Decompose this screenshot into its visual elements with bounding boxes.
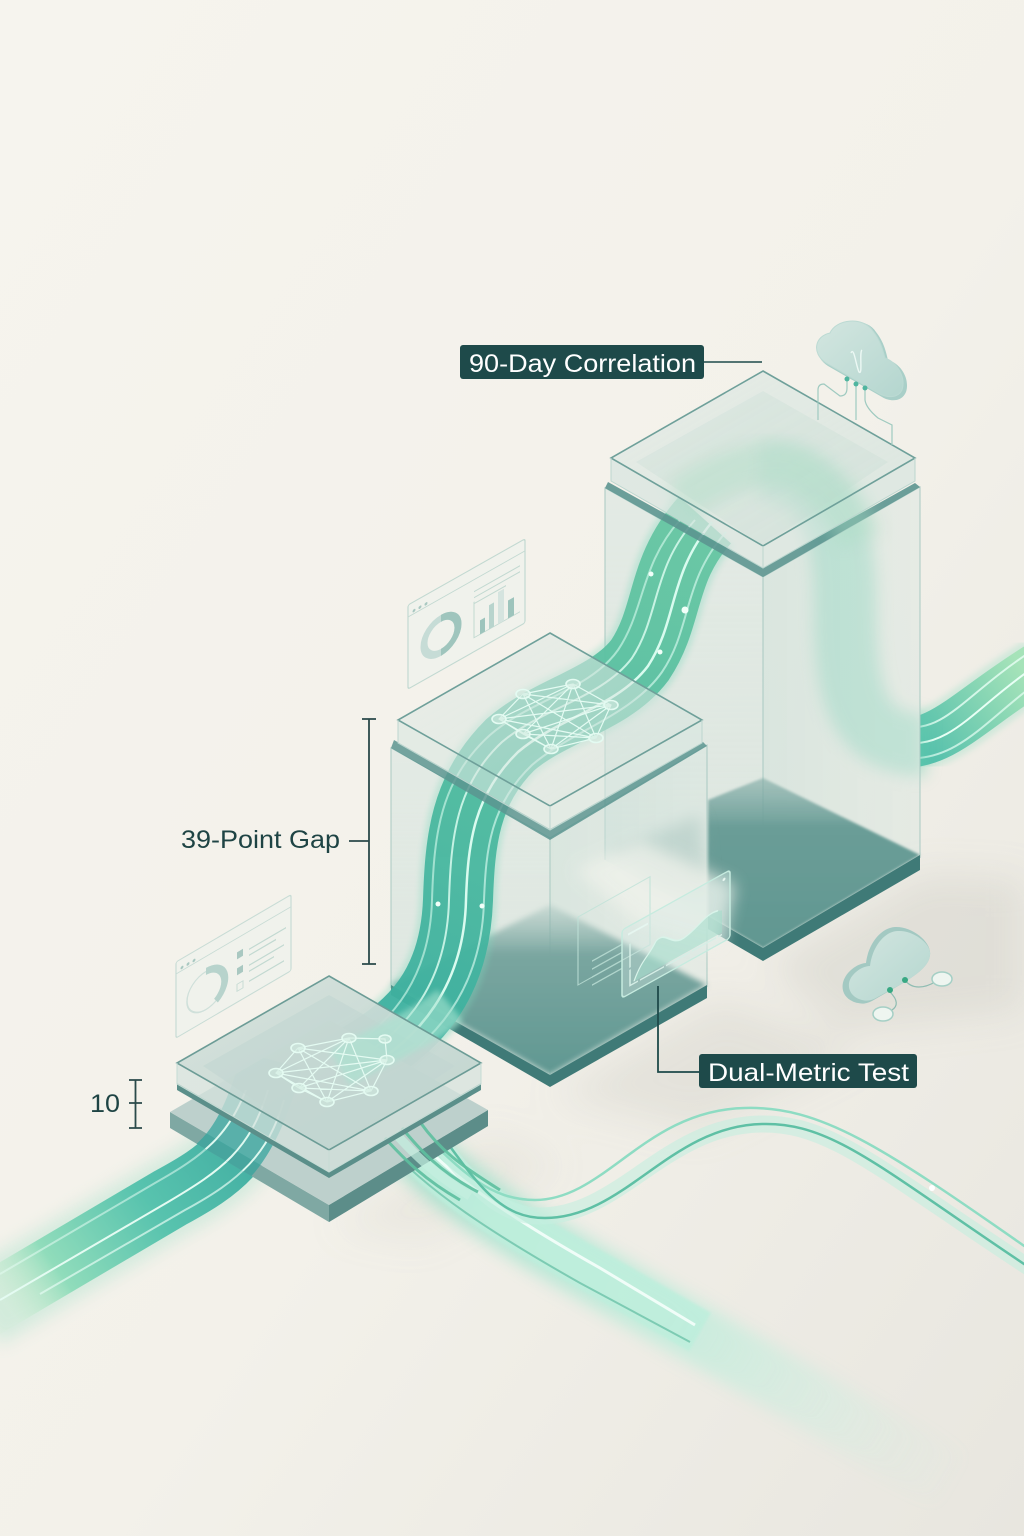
lower base plate [170, 1110, 488, 1222]
label: 10 with bracket: 10 [90, 1090, 120, 1118]
dark under-band [391, 740, 707, 840]
ribbon crossing base plate [196, 1094, 282, 1176]
column left face [391, 748, 550, 1078]
column right face [550, 745, 707, 1078]
glass slab top [398, 633, 702, 806]
soft floor seen behind neighbouring glass [612, 815, 708, 900]
data ribbon: left entry [0, 1090, 284, 1310]
chart panel [622, 870, 730, 998]
column edges [391, 745, 707, 1078]
dark under-band [177, 1083, 481, 1178]
neural network: first step [269, 1034, 394, 1106]
column base edge [708, 855, 920, 961]
label: Dual-Metric Test: Dual-Metric Test [708, 1059, 909, 1087]
ground cloud icon [843, 927, 952, 1021]
platform top: second step [391, 633, 707, 840]
floating chart panels in middle column [578, 870, 730, 998]
column right face [763, 487, 920, 948]
label: 90-Day Correlation [460, 345, 762, 379]
glass slab sides [398, 720, 702, 830]
cloud icon [817, 321, 907, 400]
platform: first step [170, 975, 501, 1222]
glass slab top [611, 371, 915, 546]
column base edge [391, 985, 707, 1087]
floor shadows [335, 875, 1024, 1240]
dark under-band [605, 482, 920, 577]
label: 10 with bracket [90, 1080, 142, 1128]
middle glass column [391, 745, 735, 1087]
column edges [605, 487, 920, 948]
small cloud group on third step [817, 321, 907, 445]
faint report panel [578, 877, 650, 993]
label: 39-Point Gap with bracket: 39-Point Gap [181, 826, 340, 854]
neural network: second step [492, 680, 618, 754]
glass slab sides [177, 1063, 481, 1172]
dashboard panel: first step [176, 895, 291, 1038]
glass slab top [177, 976, 481, 1150]
label: 90-Day Correlation: 90-Day Correlation [469, 350, 696, 378]
glass slab sides [611, 458, 915, 568]
dashboard panel: second step [408, 539, 525, 689]
data ribbon: right exit [890, 652, 1024, 758]
column floor [708, 778, 920, 948]
platform top: third step [605, 371, 920, 577]
data ribbon: lower right pale band [384, 1128, 950, 1480]
column left face [605, 488, 763, 948]
connector wires [818, 378, 892, 445]
data ribbon: rising from first to third platform [340, 520, 726, 1078]
label: Dual-Metric Test [658, 986, 917, 1088]
data ribbon: looping thin lines [418, 1108, 1024, 1268]
tall glass column [605, 470, 925, 961]
haze streak across glass [575, 840, 735, 950]
label: 39-Point Gap with bracket [181, 719, 376, 964]
column floor [391, 905, 707, 1075]
interior ribbon glow [760, 470, 925, 745]
